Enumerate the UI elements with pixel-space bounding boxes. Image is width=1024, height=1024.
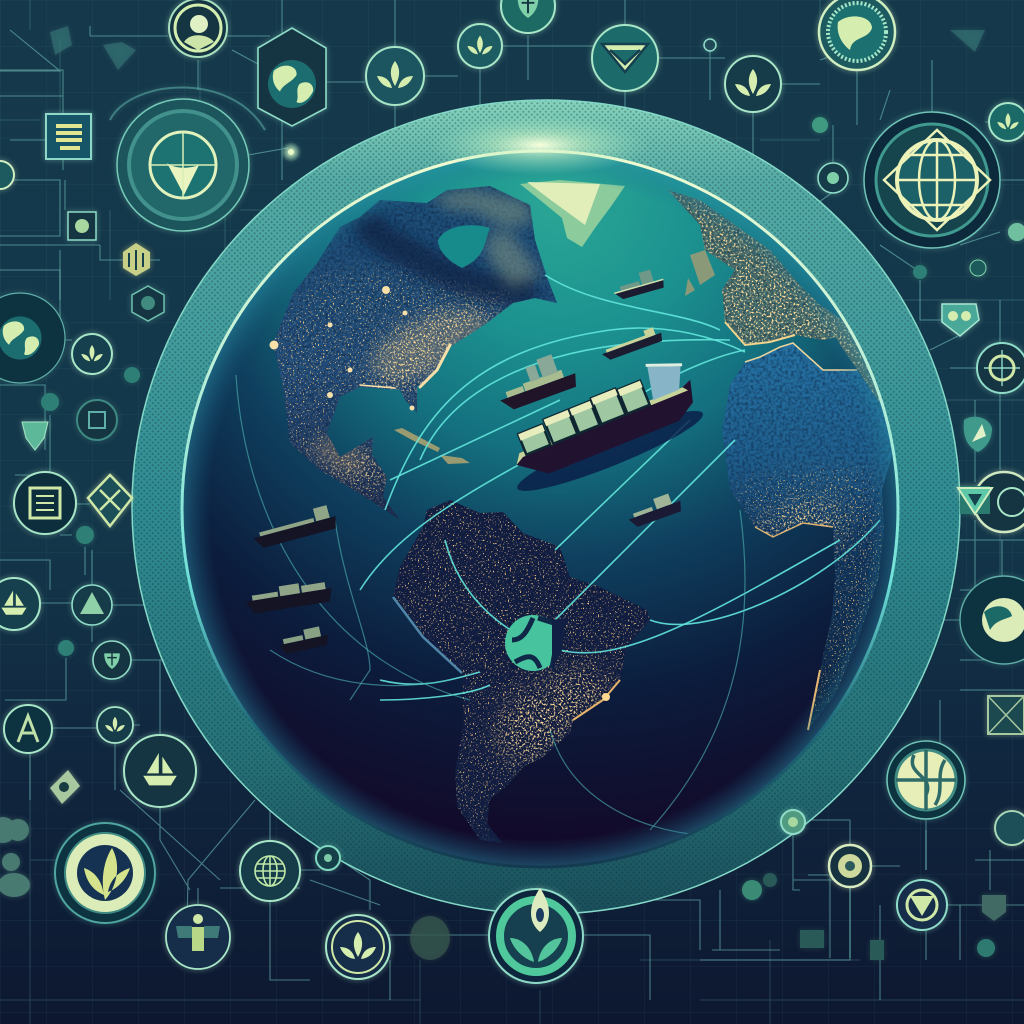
icon: left edge <box>0 161 14 189</box>
container ship: upper middle <box>599 325 664 362</box>
icon: left globe <box>0 293 65 383</box>
icon: top edge badge <box>501 0 555 33</box>
icon: lower right pale node <box>781 810 805 834</box>
icon: top ring leaf <box>366 47 424 105</box>
icon: small top node <box>704 39 828 133</box>
icon: small node lower <box>316 846 340 870</box>
outer globe ring <box>132 100 960 914</box>
container ship: west upper <box>250 504 339 550</box>
container ship: upper small <box>611 267 666 301</box>
icon: left anchor <box>0 578 40 630</box>
icon: small hex left <box>132 286 164 321</box>
shipping routes <box>360 275 880 700</box>
icon: lower left leaf <box>97 707 133 743</box>
icon: dim blob <box>410 916 450 960</box>
icon: large right globe <box>864 112 1000 248</box>
container ship: east small <box>625 490 684 529</box>
icon: top chevron badge <box>592 25 658 91</box>
icon: lower right small <box>829 845 871 887</box>
top glow on ring <box>430 115 650 175</box>
caribbean islands <box>394 428 470 464</box>
icon: right lower edge <box>977 811 1024 957</box>
icon: right shield top <box>942 304 979 336</box>
container ship: main <box>493 352 709 502</box>
dim map shapes top left <box>50 26 985 70</box>
continent: greenland <box>520 180 625 247</box>
icon: right edge cross <box>974 472 1024 532</box>
icon: sail boat <box>124 735 196 807</box>
icon: top right globe <box>819 0 895 70</box>
icon: left small badge <box>72 334 112 374</box>
container ship: west lower <box>278 625 330 655</box>
icon: lower right globe <box>887 741 965 819</box>
icon: left shield ring <box>93 641 131 679</box>
icon: left peak <box>72 585 112 625</box>
icon: heart shield <box>22 422 48 450</box>
icon: torch plant <box>166 905 230 969</box>
icon: lower leaf <box>326 915 390 979</box>
icon: top right leaf <box>725 56 781 112</box>
continent: europe <box>668 190 880 404</box>
icon: grid globe <box>240 841 300 901</box>
container ship: left of main <box>491 349 580 413</box>
icon: right tiny <box>970 223 1024 276</box>
icon: right ring <box>977 343 1024 393</box>
continent: north america <box>260 186 557 520</box>
globe <box>182 151 905 867</box>
icon: right triangle badge <box>958 486 992 514</box>
ocean <box>182 151 898 867</box>
icon: square ring <box>14 472 76 534</box>
icon: right edge small <box>989 103 1024 141</box>
icon: lower left A <box>4 705 52 753</box>
icon: diamond <box>88 475 132 526</box>
icon: small right node <box>818 163 848 193</box>
icon: large plant <box>55 823 155 923</box>
globe rim highlight <box>182 151 898 867</box>
container ship: west middle <box>244 578 334 615</box>
globe limb shading <box>182 151 898 867</box>
icon: small tag <box>50 770 80 804</box>
icon: top left badge <box>169 0 227 57</box>
icon: square menu <box>46 114 91 159</box>
icon: big left target <box>110 88 265 231</box>
icon: square crate <box>988 696 1024 734</box>
icon: top small leaf <box>458 24 502 68</box>
icons: dim lower right <box>742 873 884 960</box>
icon: dark ring <box>77 400 117 440</box>
icon: hexagon globe <box>258 28 326 126</box>
icon: bottom emblem <box>489 888 583 983</box>
icon: right large globe <box>960 576 1024 664</box>
continent: africa <box>722 343 895 735</box>
continent: south america <box>383 495 657 843</box>
icon: small square <box>68 212 96 240</box>
icon: hex gold <box>123 243 150 276</box>
icon: lower right swirl <box>897 880 947 930</box>
icon: south america emblem <box>505 615 566 671</box>
icon: right shield middle <box>964 417 992 452</box>
icon: left tiny nodes <box>41 265 927 656</box>
glowing node <box>281 142 301 162</box>
icon: edge cluster <box>0 817 30 897</box>
